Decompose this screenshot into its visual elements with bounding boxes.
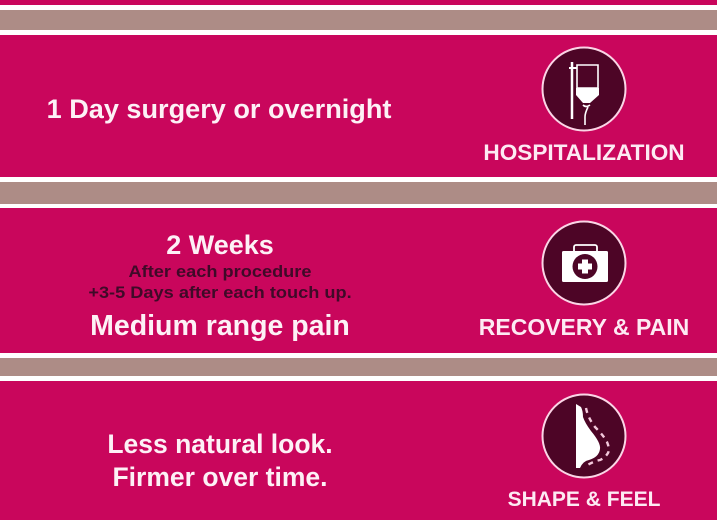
shape label: SHAPE & FEEL	[508, 488, 660, 511]
taupe divider 3	[0, 358, 717, 376]
recovery label: RECOVERY & PAIN	[479, 314, 689, 340]
panel: shape and feel	[0, 381, 717, 520]
icon: first aid kit	[542, 220, 626, 306]
recovery text block	[88, 230, 352, 342]
recovery detail: +3-5 Days after each touch up.	[88, 283, 352, 302]
taupe divider 2	[0, 182, 717, 204]
shape text: Firmer over time.	[112, 462, 328, 492]
hospitalization label: HOSPITALIZATION	[483, 140, 685, 165]
2 weeks heading: 2 Weeks	[166, 230, 274, 260]
shape text: Less natural look.	[107, 429, 333, 459]
icon: breast profile	[542, 394, 626, 478]
hospitalization text: 1 Day surgery or overnight	[47, 93, 391, 124]
recovery detail: After each procedure	[129, 262, 311, 281]
top pink strip	[0, 0, 717, 5]
pain level: Medium range pain	[90, 310, 350, 342]
panel: recovery and pain	[0, 208, 717, 353]
taupe divider 1	[0, 10, 717, 30]
panel: hospitalization	[0, 35, 717, 177]
shape text	[107, 429, 333, 492]
recovery detail	[88, 262, 352, 302]
icon: IV drip	[542, 46, 626, 132]
